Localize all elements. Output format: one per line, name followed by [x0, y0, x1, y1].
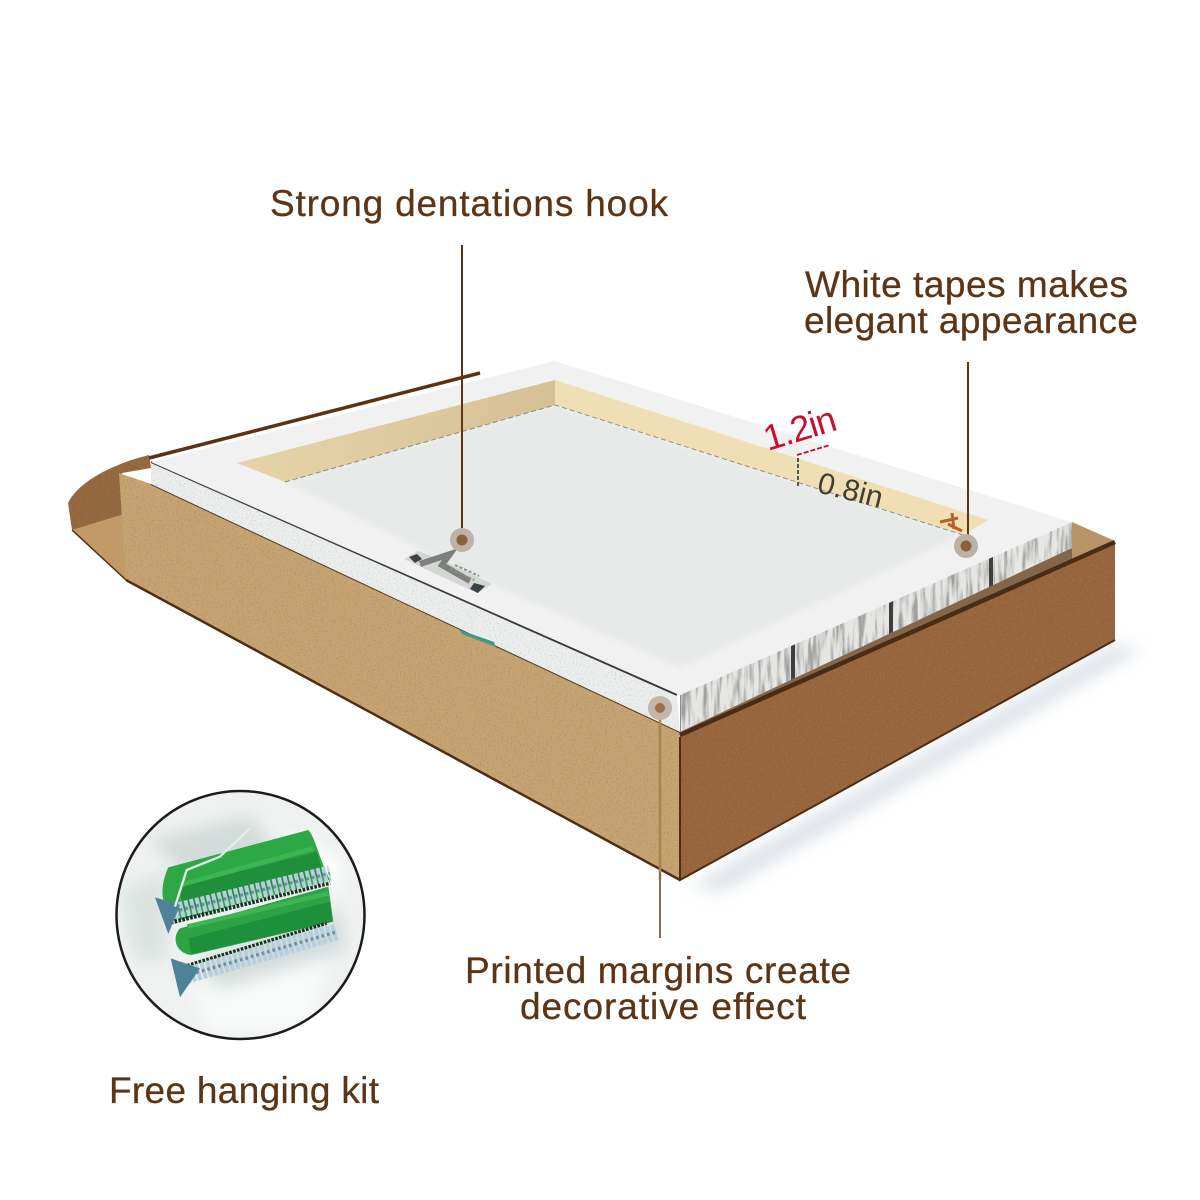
screw top shadow — [167, 883, 330, 923]
panel: hanging kit — [109, 791, 380, 1111]
screw bottom shadow — [183, 923, 327, 967]
cardboard box — [68, 373, 1115, 880]
icon: sawtooth hook — [404, 551, 492, 593]
hardware illustration — [155, 828, 337, 997]
canvas right printed margin — [680, 522, 1072, 732]
dimension: 0.8in: 0.8in — [814, 467, 886, 515]
marker: hook — [450, 528, 474, 552]
box inner lip — [1072, 522, 1115, 562]
canvas top surface — [151, 361, 1072, 695]
box rear flap — [68, 455, 151, 530]
dimension: 0.8in — [798, 458, 886, 515]
callout: strong dentations hook — [270, 183, 668, 552]
heading: hook: Strong dentations hook — [270, 183, 668, 224]
box rear top edge — [149, 373, 480, 458]
box lower flap — [72, 514, 130, 582]
leader line: white tapes — [967, 362, 969, 546]
kit circle outline — [116, 791, 364, 1039]
screw bottom — [180, 932, 337, 977]
bag tie — [175, 828, 250, 907]
text: printed margins: decorative effect — [520, 986, 807, 1027]
box inner rim — [680, 547, 1072, 737]
text: white tapes — [804, 264, 1138, 341]
callout: white tapes — [804, 264, 1138, 558]
wood stretcher opening — [237, 380, 555, 482]
leader line: hook — [461, 245, 463, 540]
caption: free hanging kit: Free hanging kit — [109, 1070, 380, 1111]
box drop shadow — [690, 644, 1142, 892]
box right front face — [680, 543, 1115, 880]
dimension: 1.2in: 1.2in — [758, 398, 841, 459]
marker: white tapes — [954, 534, 978, 558]
leader line lower part — [659, 872, 661, 938]
canvas left printed margin — [151, 462, 680, 732]
green wall plug top — [162, 830, 330, 920]
canvas panel — [151, 361, 1072, 732]
staple on stretcher — [940, 513, 962, 531]
text: printed margins: Printed margins create — [465, 950, 851, 991]
green wall plug bottom — [176, 887, 333, 955]
screw top — [163, 873, 330, 914]
callout: printed margins — [465, 696, 851, 1027]
infographic canvas — [68, 188, 1136, 1111]
text: white tapes: elegant appearance — [804, 300, 1138, 341]
kit circle background — [116, 791, 364, 1039]
back panel — [285, 405, 963, 668]
teal print detail — [460, 630, 496, 647]
text: printed margins — [465, 950, 851, 1027]
plastic bag highlights — [122, 815, 345, 1035]
box left front face — [119, 473, 680, 880]
marker: printed margins — [648, 696, 672, 720]
leader line: printed margins — [659, 708, 661, 880]
text: white tapes: White tapes makes — [805, 264, 1128, 305]
